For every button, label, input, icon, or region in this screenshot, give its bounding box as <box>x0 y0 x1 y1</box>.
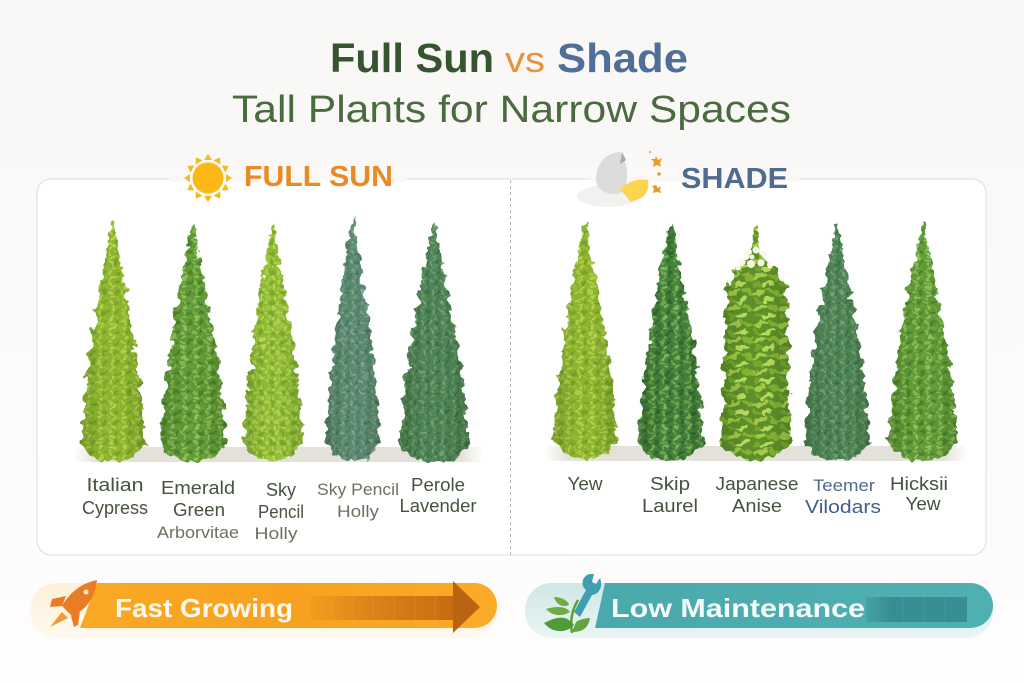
tree: Italian Cypress <box>80 219 146 461</box>
ground strip: full sun <box>76 447 481 462</box>
icon: shade egg, leaf and stars <box>577 151 662 207</box>
label: Sky Pencil Holly: Pencil <box>258 502 304 522</box>
ground strip: shade <box>546 446 966 461</box>
tree: Teemer Vilodars <box>803 222 871 460</box>
bar body <box>80 583 497 628</box>
rocket icon <box>50 580 97 627</box>
badge: low maintenance <box>525 574 993 638</box>
badge: fast growing <box>30 580 497 638</box>
tree: Sky Pencil Holly blue-green <box>325 215 381 460</box>
label: Yew: Yew <box>568 474 604 494</box>
label: Teemer Vilodars <box>805 476 881 517</box>
label: Sky Pencil Holly second: Holly <box>337 502 380 521</box>
label: Teemer Vilodars: Teemer <box>813 476 875 495</box>
label: Italian Cypress: Cypress <box>82 498 148 518</box>
label: Emerald Green Arborvitae: Emerald <box>161 478 235 498</box>
label: Skip Laurel <box>642 474 698 516</box>
flowers: Japanese Anise blossoms <box>736 246 773 270</box>
text: Low Maintenance <box>611 593 865 623</box>
tree: Japanese Anise <box>719 222 793 460</box>
tree: Perole Lavender <box>398 222 470 462</box>
label: Sky Pencil Holly: Sky <box>266 480 296 500</box>
header mask: panel border gaps <box>170 176 800 182</box>
label: Italian Cypress: Italian <box>86 475 144 495</box>
label: Japanese Anise: Japanese <box>716 474 798 494</box>
title <box>232 35 791 131</box>
label: Sky Pencil Holly second: Sky Pencil <box>317 480 399 499</box>
label: Japanese Anise <box>716 474 798 516</box>
label: Sky Pencil Holly: Holly <box>254 524 298 543</box>
label: Hicksii Yew: Yew <box>906 494 942 514</box>
label: Hicksii Yew <box>890 474 948 514</box>
label: Italian Cypress <box>82 475 148 518</box>
label: Japanese Anise: Anise <box>732 496 782 516</box>
label: Perole Lavender <box>400 475 477 516</box>
text: Fast Growing <box>115 593 293 623</box>
title: vs <box>505 39 545 80</box>
bar body <box>595 583 993 628</box>
label: Teemer Vilodars: Vilodars <box>805 497 881 517</box>
label: Sky Pencil Holly <box>254 480 304 543</box>
tree: Emerald Green Arborvitae <box>159 222 227 461</box>
progress segments <box>866 597 967 622</box>
heading: shade: SHADE <box>681 163 788 195</box>
tree: Hicksii Yew <box>887 221 959 460</box>
tree: Yew <box>552 222 618 458</box>
label: Emerald Green Arborvitae: Arborvitae <box>157 523 239 542</box>
heading: full sun: FULL SUN <box>244 161 393 193</box>
title: Full Sun <box>330 35 494 81</box>
tree: Skip Laurel <box>637 221 705 460</box>
label: Skip Laurel: Laurel <box>642 496 698 516</box>
label: Skip Laurel: Skip <box>650 474 690 494</box>
label: Emerald Green Arborvitae: Green <box>173 500 225 520</box>
icon: sun <box>184 154 232 202</box>
growth arrow <box>310 581 480 633</box>
label: Perole Lavender: Perole <box>411 475 465 495</box>
bar background <box>30 583 497 638</box>
panel: plant comparison card <box>37 179 986 555</box>
title: Shade <box>557 35 688 81</box>
label: Sky Pencil Holly second <box>317 480 399 521</box>
bar background <box>525 583 993 638</box>
label: Perole Lavender: Lavender <box>400 496 477 516</box>
center divider <box>510 180 512 555</box>
label: Emerald Green Arborvitae <box>157 478 239 542</box>
label: Hicksii Yew: Hicksii <box>890 474 948 494</box>
title: Tall Plants for Narrow Spaces <box>232 89 791 131</box>
wrench and plant icon <box>544 574 601 633</box>
tree: Sky Pencil Holly <box>242 222 304 460</box>
